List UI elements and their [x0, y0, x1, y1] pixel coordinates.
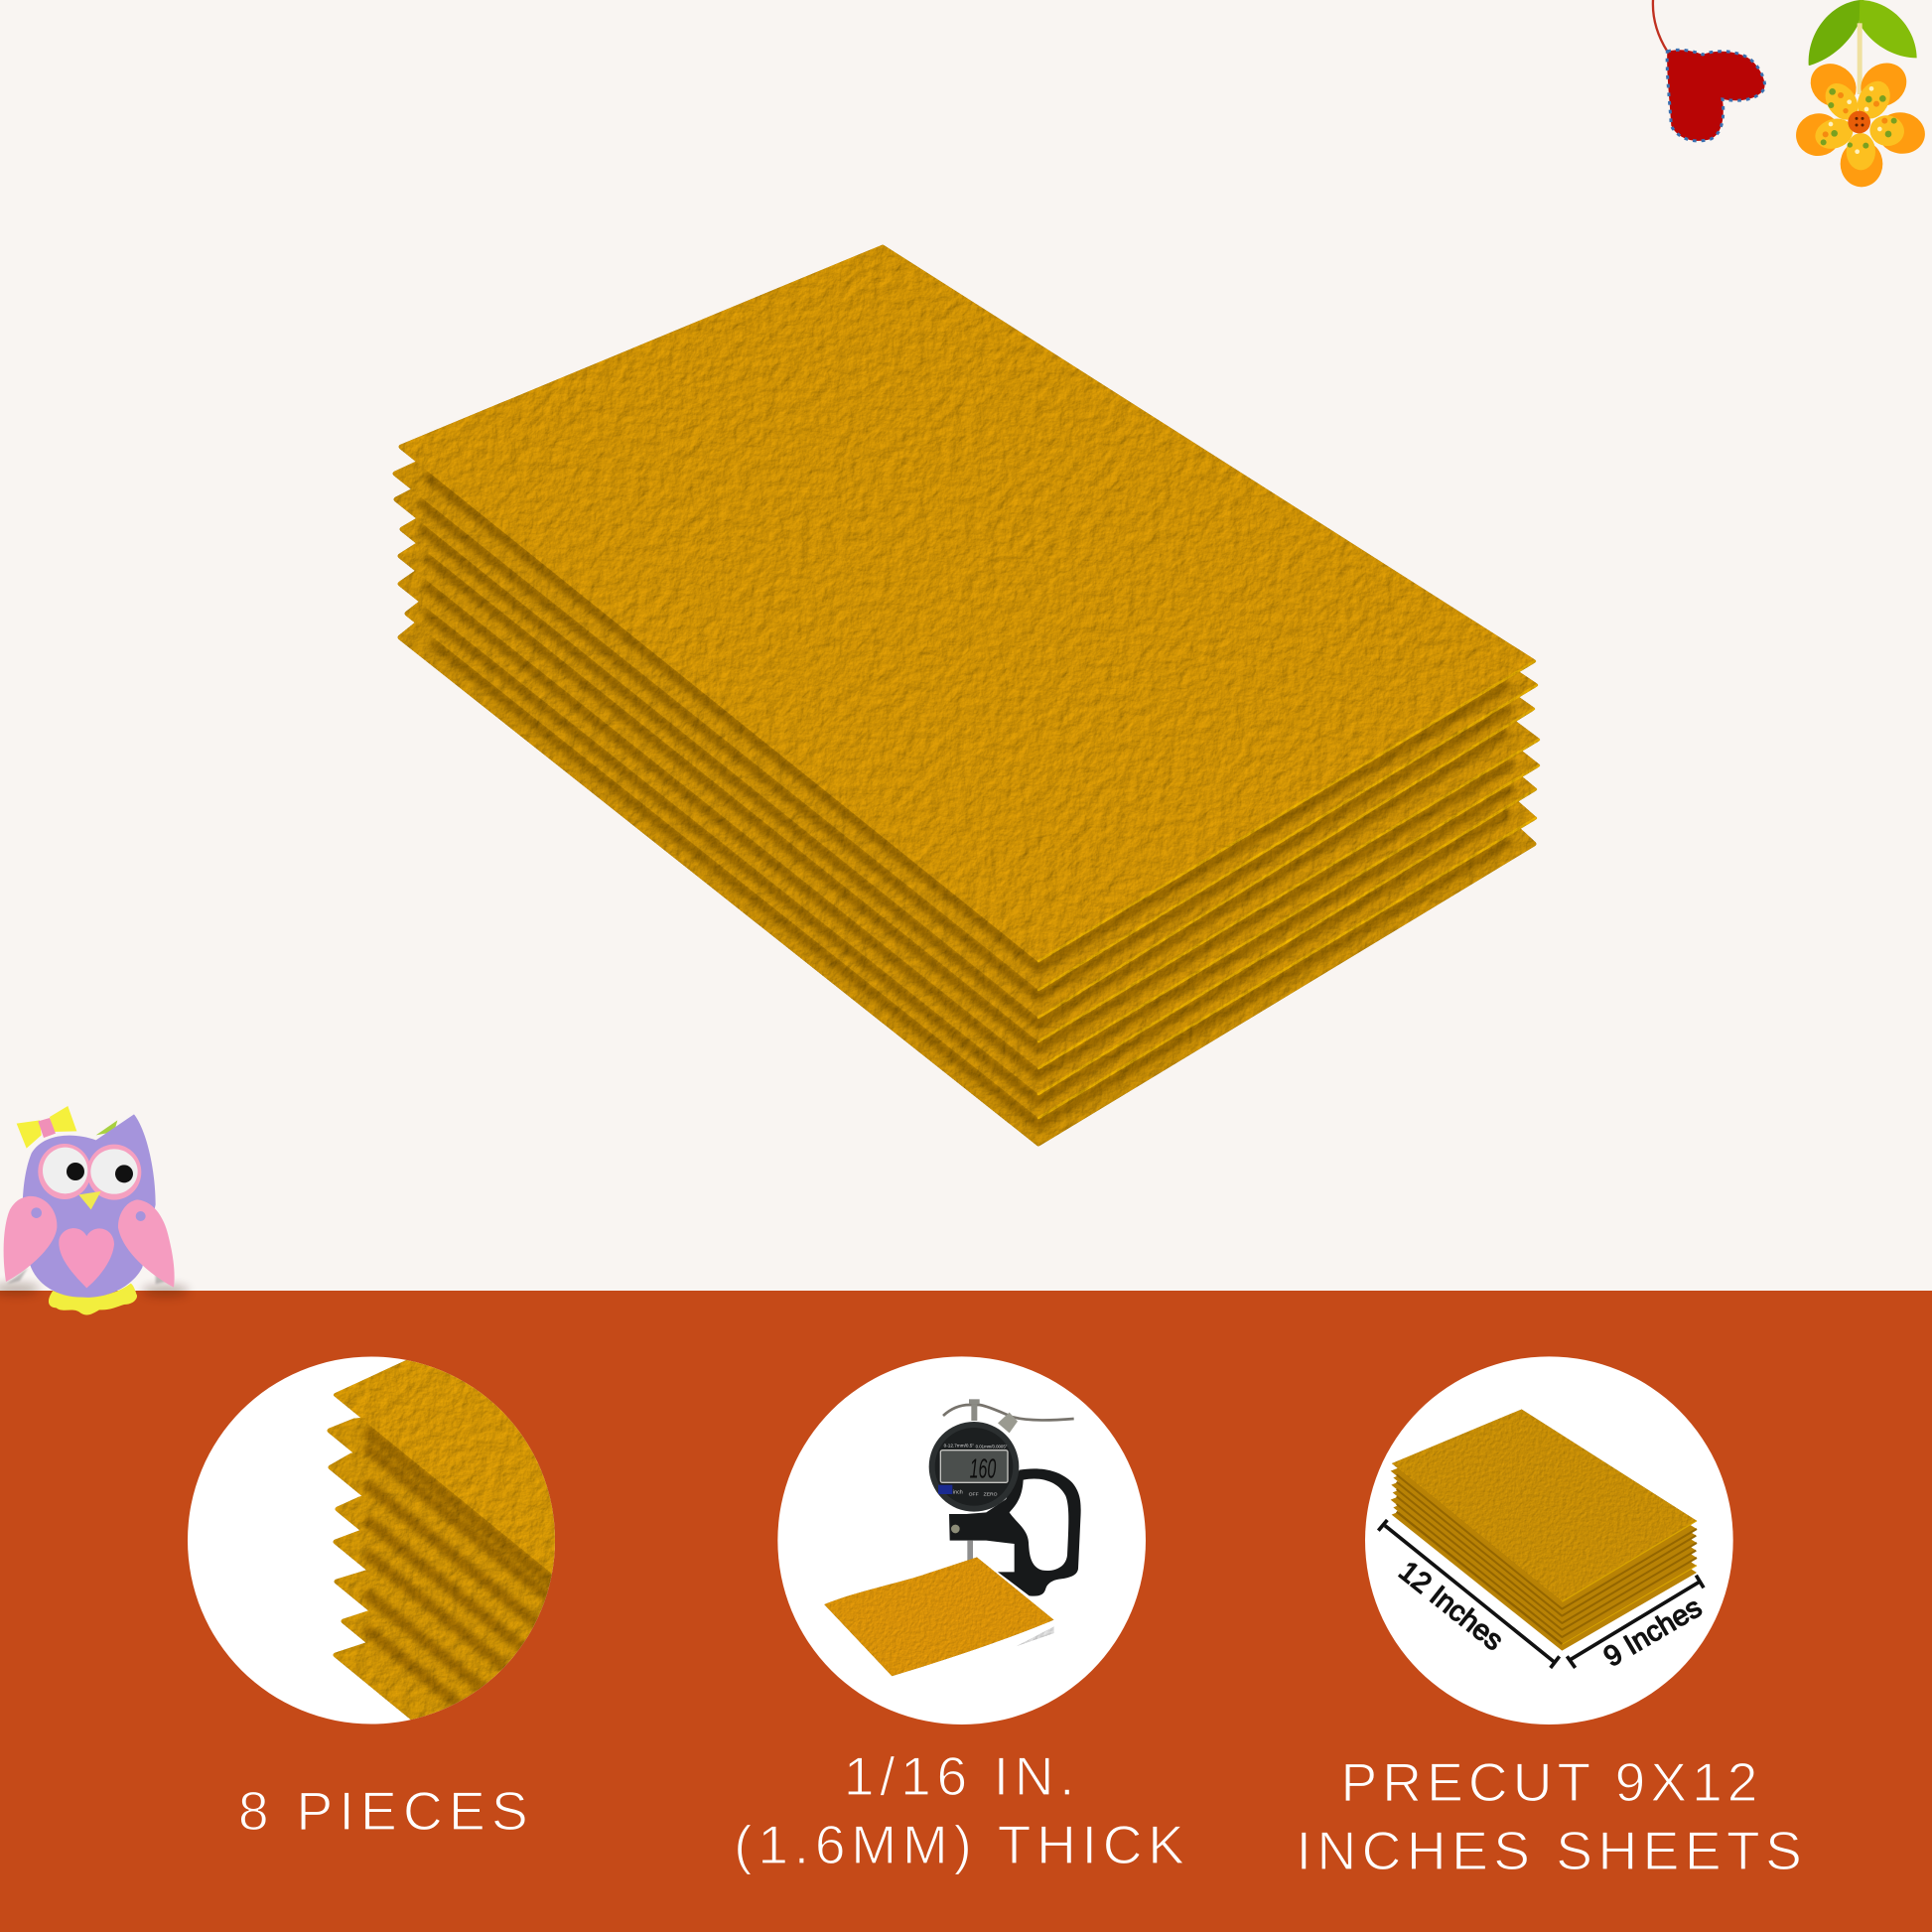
- panel: white circle with thickness gauge: [777, 1356, 1146, 1725]
- dimension: 9 inches: 9 Inches: [1598, 1591, 1708, 1674]
- caption: 8 pieces: 8 PIECES: [238, 1780, 534, 1842]
- thickness gauge: inch: [953, 1490, 963, 1496]
- thickness gauge: ZERO: [984, 1492, 998, 1498]
- caption: thickness: 1/16 IN.: [844, 1745, 1080, 1807]
- dimension: 9 inches: [1567, 1576, 1708, 1674]
- dimension: 12 inches: 12 Inches: [1393, 1556, 1509, 1657]
- caption: thickness: [734, 1745, 1190, 1875]
- small felt stack: [1391, 1409, 1697, 1651]
- measured felt swatch: [824, 1557, 1054, 1676]
- main product: stack of eight felt sheets: [395, 247, 1539, 1144]
- bottom band: [0, 1291, 1932, 1932]
- panel: white circle with stack edge close-up: [188, 1356, 555, 1724]
- panel: white circle with dimensioned sheet stack: [1365, 1356, 1733, 1725]
- icon: felt heart ornament: [1653, 0, 1765, 141]
- thickness gauge: 160: [970, 1452, 996, 1483]
- thickness gauge: [929, 1399, 1081, 1596]
- icon: felt owl: [0, 1106, 189, 1314]
- caption: sheet size: INCHES SHEETS: [1297, 1820, 1807, 1881]
- thickness gauge: 0-12.7mm/0.5": [944, 1443, 974, 1448]
- caption: sheet size: PRECUT 9X12: [1341, 1751, 1762, 1813]
- dimension: 12 inches: [1378, 1520, 1560, 1668]
- icon: felt flower ornament: [1793, 0, 1928, 187]
- thickness gauge: OFF: [969, 1492, 979, 1498]
- thickness gauge: 0.01mm/0.0005": [976, 1444, 1008, 1449]
- caption: sheet size: [1297, 1751, 1807, 1881]
- caption: thickness: (1.6MM) THICK: [734, 1814, 1190, 1875]
